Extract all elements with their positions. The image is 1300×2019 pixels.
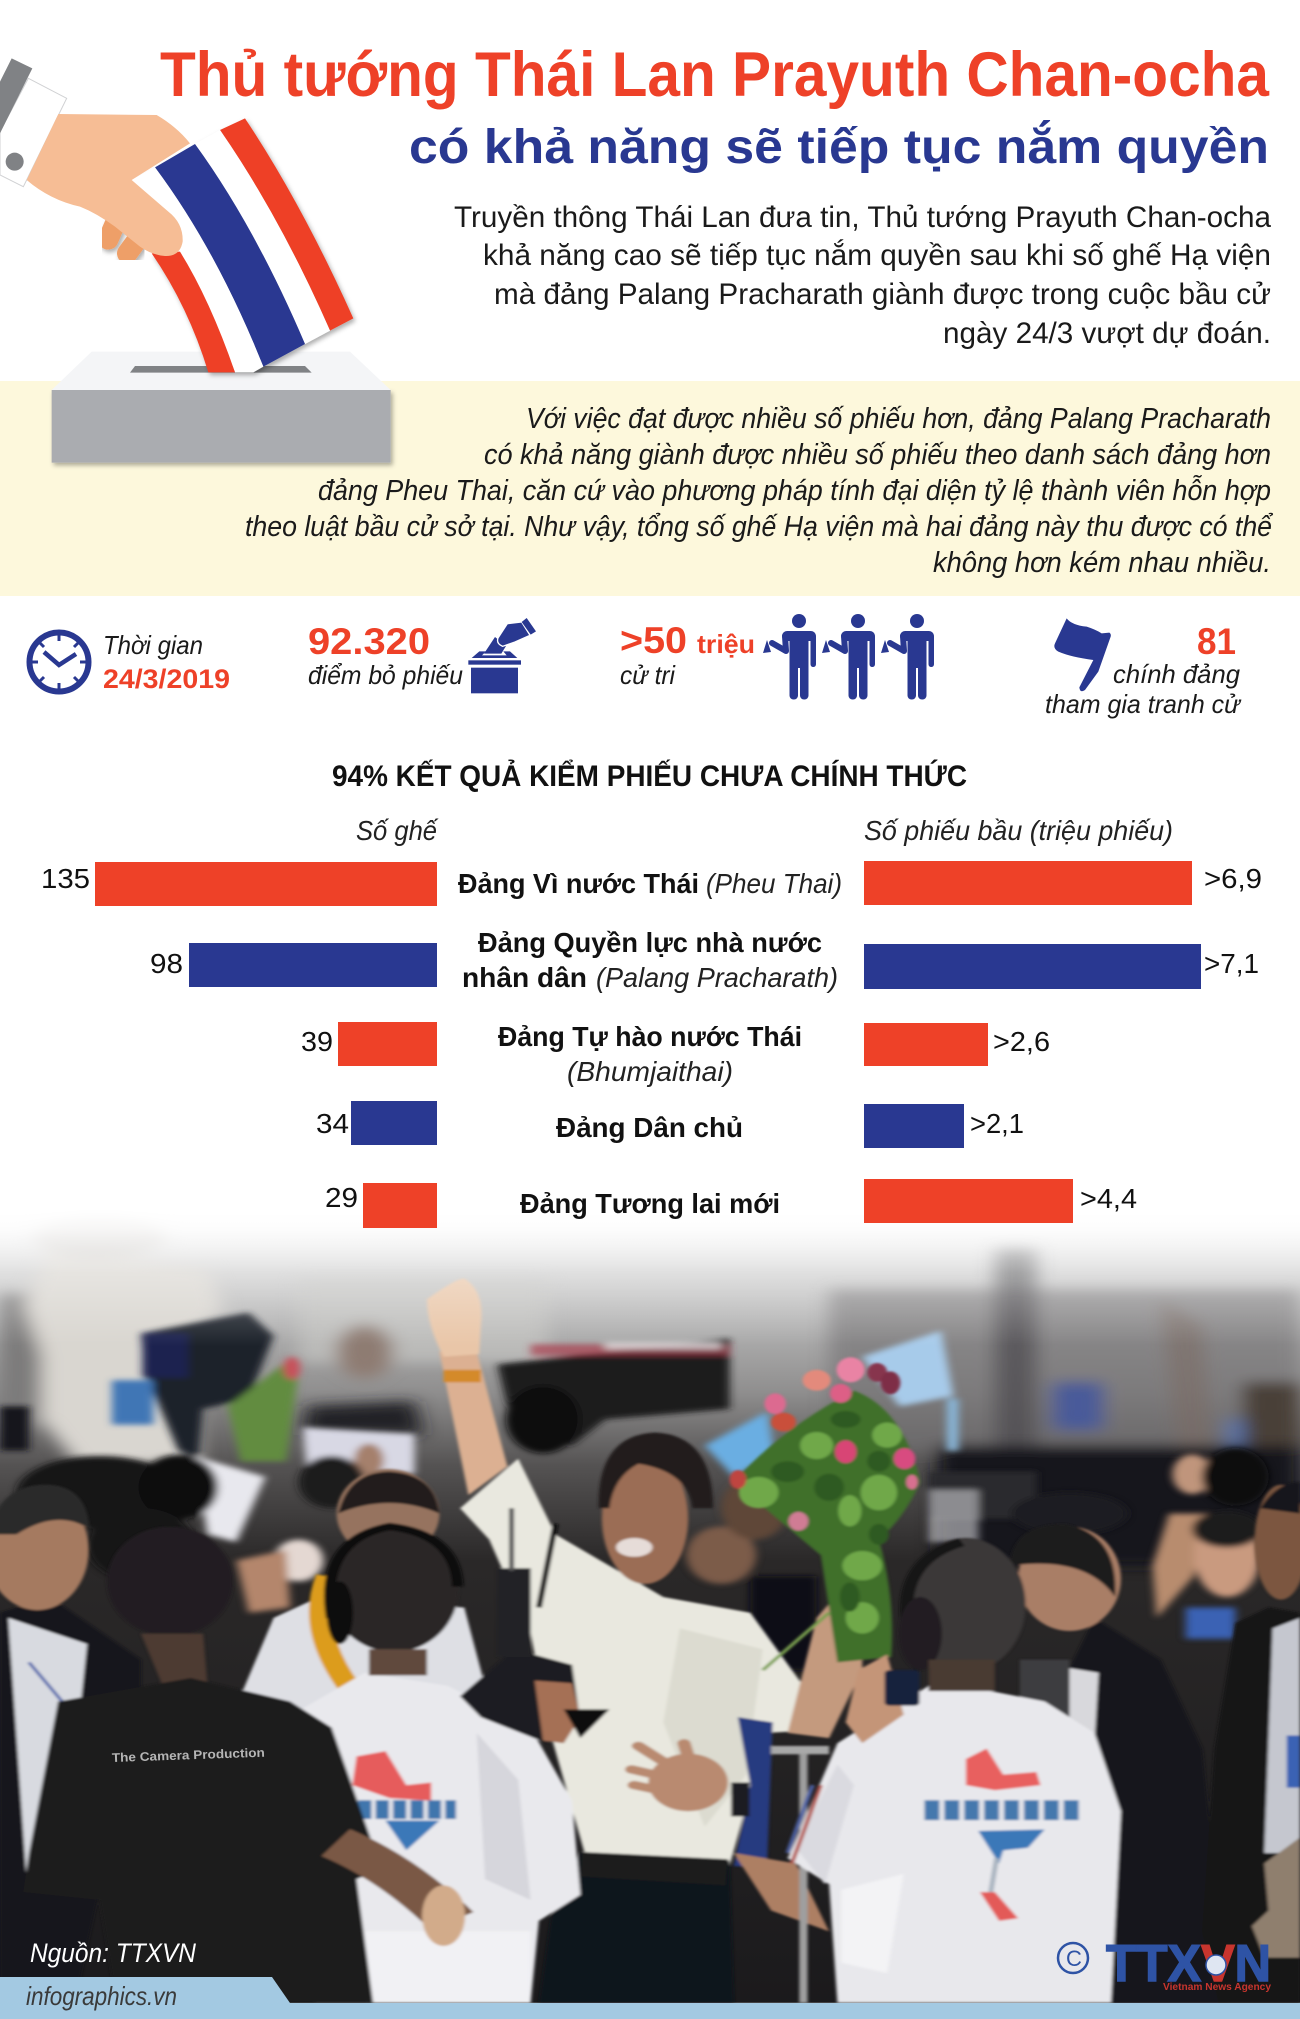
stat: voters: >50: [620, 620, 687, 661]
stat: parties: tham gia tranh cử: [1045, 689, 1241, 719]
bar row: Bhumjaithai: >2,6: [993, 1026, 1050, 1057]
bar row: Pheu Thai: 135: [41, 863, 90, 894]
intro paragraph: Truyền thông Thái Lan đưa tin, Thủ tướng Prayuth Chan-ocha: [454, 201, 1271, 234]
TTXVN logo: TTXVN: [1106, 1935, 1271, 1993]
bar row: Palang Pracharath: nhân dân: [462, 962, 587, 993]
hand: [27, 114, 190, 256]
midground: cameras, flags, signs: [0, 1312, 1269, 1670]
stat: parties: 81: [1197, 621, 1236, 662]
shirt cuff: [0, 58, 67, 187]
ballot box body: [52, 390, 391, 463]
bar row: Democrat: 34: [316, 1108, 349, 1139]
Prayuth shirt: [460, 1459, 817, 1866]
Prayuth raised arm: [439, 1351, 507, 1495]
bar row: Bhumjaithai: (Bhumjaithai): [567, 1056, 733, 1087]
stat: voters: [620, 614, 934, 700]
italic analysis paragraph: [245, 403, 1274, 579]
chart axis label: seats: Số ghế: [356, 815, 439, 846]
bar row: Palang Pracharath: [150, 927, 1259, 993]
italic analysis paragraph: không hơn kém nhau nhiều.: [933, 547, 1271, 579]
bar row: Pheu Thai: >6,9: [1204, 863, 1262, 894]
stat: parties: chính đảng: [1113, 659, 1241, 689]
Prayuth lower hand: [632, 1743, 728, 1811]
chart axis label: votes: Số phiếu bầu (triệu phiếu): [864, 815, 1173, 846]
bar row: Palang Pracharath: 98: [150, 948, 183, 979]
intro paragraph: [454, 201, 1271, 350]
fingers: [108, 220, 138, 253]
stat: voters: cử tri: [620, 660, 676, 690]
bouquet: [734, 1391, 920, 1662]
top fade to white: [0, 1200, 1300, 1346]
stat: election date: Thời gian: [103, 630, 203, 660]
stat: polling stations: 92.320: [308, 621, 430, 662]
bar row: Bhumjaithai: 39: [301, 1026, 333, 1057]
bar row: Palang Pracharath: Đảng Quyền lực nhà nước: [478, 927, 822, 958]
stat: parties: [1045, 618, 1241, 719]
title line 2: có khả năng sẽ tiếp tục nắm quyền: [409, 119, 1269, 174]
photo: Prayuth Chan-ocha greeting supporters: [0, 1200, 1300, 2003]
background jacket with garland: [240, 1597, 489, 1733]
stat: election date: [30, 630, 230, 694]
Prayuth head: [602, 1453, 688, 1584]
stat: voters: triệu: [697, 629, 755, 659]
intro paragraph: mà đảng Palang Pracharath giành được trong cuộc bầu cử: [494, 278, 1271, 311]
panel: cream summary band: [0, 381, 1300, 596]
black shirt man: [107, 1526, 233, 1636]
shirt lettering: The Camera Production: [112, 1746, 265, 1765]
blurred background crowd: [0, 1216, 1300, 1566]
source credit: Nguồn: TTXVN: [30, 1938, 196, 1968]
TTXVN logo: Vietnam News Agency: [1163, 1981, 1271, 1993]
bar row: Pheu Thai: (Pheu Thai): [706, 868, 842, 899]
bar row: Future Forward: >4,4: [1080, 1183, 1137, 1214]
icon: ballot box with hand: [468, 618, 536, 693]
far right man: [1202, 1607, 1300, 2003]
bar row: Palang Pracharath: (Palang Pracharath): [596, 962, 838, 993]
bar row: Future Forward: 29: [325, 1182, 358, 1213]
bar row: Pheu Thai: Đảng Vì nước Thái: [458, 868, 699, 899]
ballot slot: [130, 366, 312, 373]
Prayuth trousers: [539, 1852, 734, 2003]
bar row: Bhumjaithai: Đảng Tự hào nước Thái: [498, 1021, 802, 1052]
footer strip: [0, 1977, 1300, 2019]
Thai flag ballot: [132, 118, 353, 372]
bar row: Future Forward: [325, 1179, 1137, 1228]
intro paragraph: khả năng cao sẽ tiếp tục nắm quyền sau khi số ghế Hạ viện: [483, 239, 1271, 272]
bar row: Future Forward: Đảng Tương lai mới: [520, 1188, 780, 1219]
intro paragraph: ngày 24/3 vượt dự đoán.: [943, 317, 1271, 350]
bar row: Democrat: Đảng Dân chủ: [556, 1112, 743, 1143]
foreground people: [0, 1278, 1300, 2003]
icon: clock: [30, 632, 88, 692]
ballot box top: [52, 352, 391, 390]
stat: polling stations: điểm bỏ phiếu: [308, 660, 463, 690]
white-jacket cameraman right: [788, 1681, 1121, 2003]
title: [160, 40, 1270, 174]
bar row: Democrat: >2,1: [970, 1108, 1024, 1139]
camera on shoulder: [460, 1649, 580, 1743]
left guard: [0, 1597, 141, 2003]
white-jacket cameraman left: [297, 1673, 580, 2003]
illustration: hand dropping Thai flag ballot into box: [0, 58, 391, 463]
icon: three voters: [763, 614, 934, 700]
TTXVN logo: C: [1066, 1946, 1082, 1971]
stat: polling stations: [308, 618, 536, 693]
metal barrier: [771, 1746, 829, 1754]
bar row: Bhumjaithai: [301, 1021, 1050, 1087]
black coat man right: [1053, 1618, 1227, 2003]
bar row: Pheu Thai: [41, 861, 1262, 906]
stat: election date: 24/3/2019: [103, 664, 230, 694]
website label: infographics.vn: [26, 1981, 177, 2011]
bar row: Palang Pracharath: >7,1: [1204, 948, 1259, 979]
chart heading: 94% KẾT QUẢ KIỂM PHIẾU CHƯA CHÍNH THỨC: [332, 759, 967, 793]
icon: waving flag: [1054, 618, 1111, 691]
bar row: Democrat: [316, 1101, 1024, 1148]
